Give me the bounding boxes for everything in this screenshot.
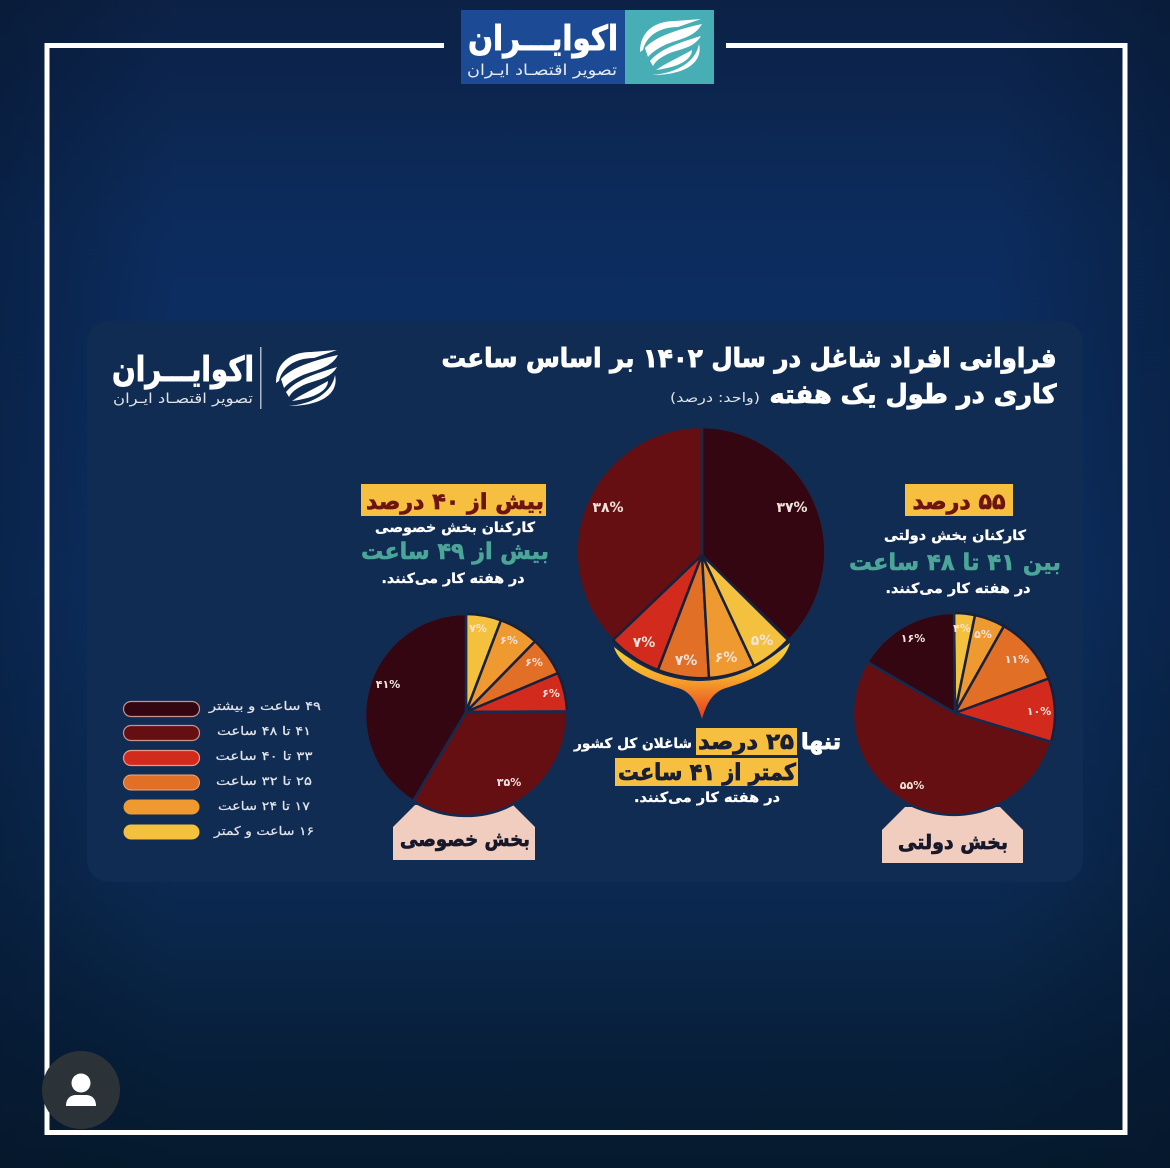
left pie chart: private sector: ۶% bbox=[542, 687, 560, 700]
legend: 25-32 hours bbox=[124, 774, 312, 790]
callout: public sector: ۵۵ درصد bbox=[912, 490, 1006, 515]
center pie chart: ۷% bbox=[633, 635, 655, 651]
title bbox=[442, 344, 1057, 410]
left pie chart: private sector: ۶% bbox=[525, 656, 543, 669]
callout: nationwide: کمتر از ۴۱ ساعت bbox=[618, 760, 797, 786]
legend bbox=[124, 699, 321, 840]
callout: private sector: کارکنان بخش خصوصی bbox=[375, 520, 536, 536]
label: public sector: بخش دولتی bbox=[898, 830, 1008, 854]
legend: 49+ hours bbox=[124, 699, 321, 716]
top logo wordmark: اکوایـــران bbox=[468, 19, 618, 59]
center pie chart: ۳۸% bbox=[592, 500, 624, 516]
callout: public sector bbox=[849, 484, 1061, 597]
legend: 41-48 hours bbox=[124, 724, 311, 740]
callout: private sector bbox=[361, 484, 549, 587]
title: فراوانی افراد شاغل در سال ۱۴۰۲ بر اساس ساعت bbox=[442, 344, 1056, 374]
unit note: (واحد: درصد) bbox=[670, 391, 760, 406]
right pie chart: public sector: ۱۱% bbox=[1005, 653, 1029, 666]
panel logo icon bbox=[276, 350, 338, 406]
panel logo tagline: تصویر اقتصـاد ایـران bbox=[113, 391, 253, 407]
panel logo wordmark: اکوایـــران bbox=[112, 350, 254, 390]
right pie chart: public sector: ۵% bbox=[974, 628, 992, 641]
right pie chart: public sector bbox=[853, 613, 1055, 863]
callout: nationwide: ۲۵ درصد bbox=[698, 730, 794, 755]
title: کاری در طول یک هفته bbox=[770, 380, 1057, 410]
callout: nationwide: تنها bbox=[801, 730, 841, 755]
legend: 16 or less: ۱۶ ساعت و کمتر bbox=[213, 824, 314, 839]
panel bbox=[87, 321, 1083, 882]
callout: private sector: بیش از ۴۹ ساعت bbox=[361, 539, 549, 565]
left pie chart: private sector: ۷% bbox=[469, 622, 487, 635]
legend: 33-40 hours: ۳۳ تا ۴۰ ساعت bbox=[215, 749, 313, 763]
left pie chart: private sector: ۶% bbox=[500, 634, 518, 647]
panel logo bbox=[112, 347, 338, 409]
right pie chart: public sector: ۱۶% bbox=[901, 632, 925, 645]
right pie chart: public sector: ۱۰% bbox=[1027, 705, 1051, 718]
left pie chart: private sector: ۴۱% bbox=[376, 678, 400, 691]
callout: private sector: بیش از ۴۰ درصد bbox=[366, 490, 544, 515]
callout: nationwide: شاغلان کل کشور bbox=[573, 736, 692, 752]
legend: 41-48 hours: ۴۱ تا ۴۸ ساعت bbox=[217, 724, 311, 738]
top logo icon bbox=[640, 19, 702, 75]
bowl under center pie bbox=[614, 643, 790, 719]
legend: 17-24 hours: ۱۷ تا ۲۴ ساعت bbox=[218, 799, 311, 813]
center pie chart: ۶% bbox=[715, 650, 737, 666]
legend: 17-24 hours bbox=[124, 799, 311, 814]
right pie chart: public sector: ۴% bbox=[953, 622, 971, 635]
callout: public sector: کارکنان بخش دولتی bbox=[884, 528, 1027, 544]
callout: nationwide bbox=[573, 728, 841, 806]
center pie chart: ۵% bbox=[751, 633, 773, 649]
label: private sector: بخش خصوصی bbox=[400, 827, 530, 851]
callout: nationwide: در هفته کار می‌کنند. bbox=[634, 790, 780, 806]
callout: private sector: در هفته کار می‌کنند. bbox=[382, 571, 524, 587]
avatar icon bbox=[42, 1051, 120, 1129]
label: public sector bbox=[882, 807, 1023, 863]
legend: 33-40 hours bbox=[124, 749, 313, 766]
center pie chart bbox=[577, 427, 825, 719]
top logo bbox=[461, 10, 714, 84]
right pie chart: public sector: ۵۵% bbox=[900, 779, 924, 792]
legend: 25-32 hours: ۲۵ تا ۳۲ ساعت bbox=[216, 774, 312, 788]
callout: public sector: بین ۴۱ تا ۴۸ ساعت bbox=[849, 550, 1061, 576]
left pie chart: private sector bbox=[365, 614, 567, 860]
center pie chart: ۳۷% bbox=[776, 500, 808, 516]
legend: 16 or less bbox=[124, 824, 314, 840]
callout: public sector: در هفته کار می‌کنند. bbox=[886, 581, 1030, 597]
legend: 49+ hours: ۴۹ ساعت و بیشتر bbox=[208, 699, 321, 714]
label: private sector bbox=[393, 805, 535, 860]
top logo tagline: تصویر اقتصـاد ایـران bbox=[467, 61, 617, 79]
left pie chart: private sector: ۳۵% bbox=[497, 776, 521, 789]
center pie chart: ۷% bbox=[675, 653, 697, 669]
